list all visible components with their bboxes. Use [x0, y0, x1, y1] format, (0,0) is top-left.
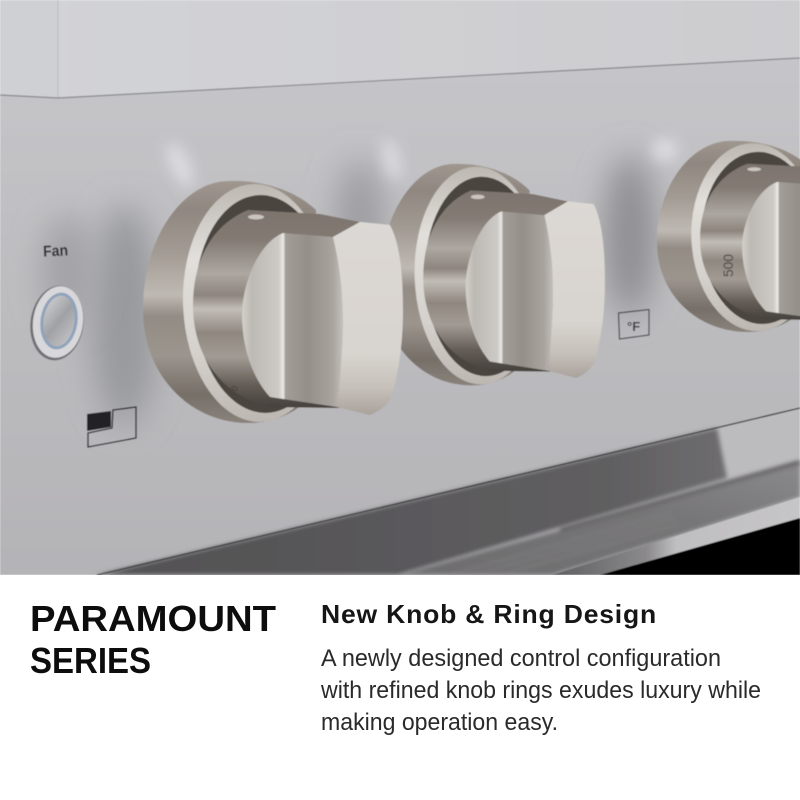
handle lip	[552, 497, 800, 575]
label: Fan: Fan	[43, 242, 69, 261]
lower front band	[97, 408, 800, 575]
hood	[0, 0, 800, 98]
title	[30, 598, 276, 681]
knob 1	[143, 181, 403, 425]
body text: with refined knob rings exudes luxury while	[320, 677, 761, 704]
subheading: New Knob & Ring Design	[321, 599, 657, 629]
body text: making operation easy.	[321, 709, 558, 736]
white caption panel	[0, 575, 800, 800]
body text: A newly designed control configuration	[321, 645, 721, 672]
icon: temperature unit: °F	[627, 319, 640, 334]
icon: temperature unit	[618, 310, 649, 339]
knob 3	[657, 141, 800, 333]
knob 1 scale mark: 0	[229, 384, 240, 393]
oven handle	[398, 462, 800, 575]
panel shading	[42, 136, 678, 425]
product photo: control panel	[0, 0, 800, 575]
knob 1 foreground overlap	[333, 222, 403, 415]
title: SERIES	[30, 640, 151, 681]
knob 3 temperature mark: 500	[720, 254, 736, 277]
body text	[320, 645, 761, 736]
icon: double oven	[87, 407, 136, 447]
title: PARAMOUNT	[30, 598, 276, 639]
icon: fan button	[26, 282, 88, 364]
knob 2	[380, 164, 605, 387]
